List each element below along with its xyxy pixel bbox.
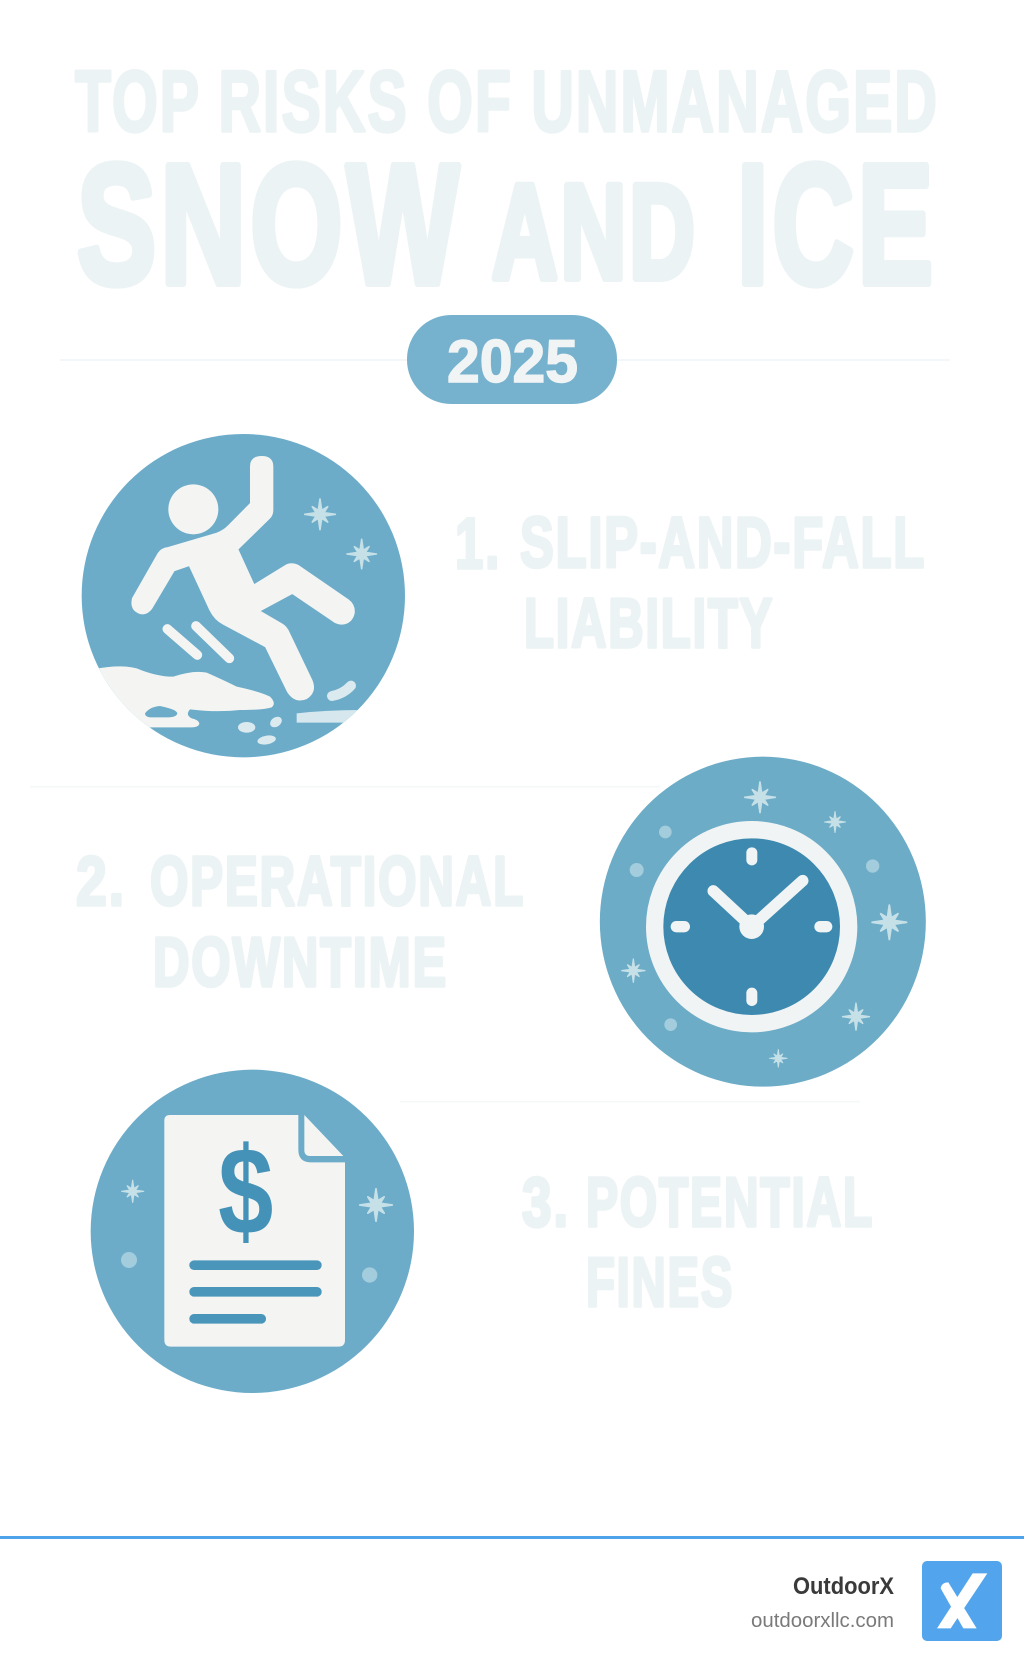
clock ticks — [671, 847, 832, 1006]
risk 2 text: OPERATIONAL — [150, 842, 525, 920]
page fold — [304, 1115, 343, 1156]
brand url: outdoorxllc.com — [751, 1610, 894, 1632]
icon: slipping person — [82, 434, 405, 757]
footer brand — [751, 1561, 1002, 1641]
ice patch — [297, 710, 360, 723]
year badge — [407, 315, 617, 404]
brand name: OutdoorX — [793, 1573, 894, 1600]
logo — [922, 1561, 1002, 1641]
title — [75, 54, 939, 320]
person — [168, 484, 218, 534]
dollar sign: $ — [218, 1121, 273, 1261]
risk 3 text: POTENTIAL — [586, 1163, 874, 1241]
risk 2 text: 2. — [76, 842, 126, 920]
risk 3 text — [522, 1163, 874, 1321]
year badge: 2025 — [447, 328, 578, 395]
title line 2: SNOW — [77, 130, 463, 320]
risk 1 text: 1. — [455, 505, 501, 584]
title line 2 — [77, 130, 937, 320]
document — [164, 1115, 345, 1347]
risk 3 text: FINES — [586, 1243, 734, 1321]
text lines — [189, 1260, 322, 1324]
risk 1 text — [455, 504, 926, 662]
footer rule — [0, 1536, 1024, 1539]
risk 1 text: LIABILITY — [524, 584, 774, 662]
title line 2: AND — [492, 158, 698, 307]
snowflakes — [305, 499, 335, 530]
dots — [121, 1252, 377, 1283]
dots — [630, 826, 879, 1031]
risk 2 text: DOWNTIME — [153, 923, 448, 1001]
clock face — [655, 830, 849, 1024]
motion lines — [167, 626, 229, 658]
snowflakes — [122, 1180, 144, 1202]
snow drift — [93, 666, 274, 727]
icon: clock — [600, 757, 926, 1087]
risk 2 text — [76, 842, 525, 1001]
ice pieces — [238, 686, 351, 746]
clock hands — [713, 881, 803, 927]
snowflakes — [745, 782, 775, 813]
icon: fine document — [91, 1070, 414, 1393]
risk 3 text: 3. — [522, 1163, 570, 1241]
